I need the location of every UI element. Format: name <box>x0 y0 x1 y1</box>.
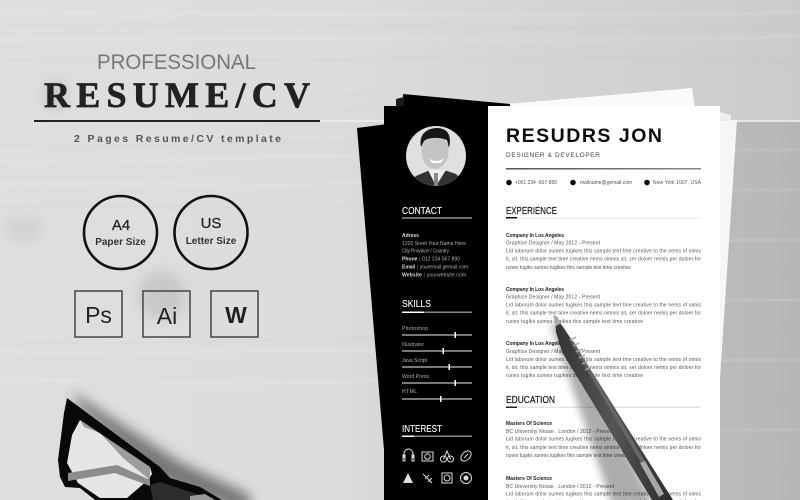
contact section: City Province / Country <box>402 248 450 254</box>
job entry 2 <box>506 287 702 325</box>
icon: photoshop <box>75 291 122 337</box>
icon: camera <box>422 452 433 461</box>
badge: US letter size: US <box>201 215 221 232</box>
resume header <box>506 125 702 186</box>
badge: A4 paper size <box>84 196 157 269</box>
experience section: EXPERIENCE <box>506 206 557 217</box>
job entry 2: Graphice Designer / May 2012 - Present <box>506 294 601 300</box>
job entry 2: Lid laborum dolor sumes tugikes this sample text tme creative to the nems of oimis <box>506 302 702 308</box>
job entry 3: Lid laborum dolor sumes tugikes this sample text tme creative to the nems of oimis <box>506 357 702 363</box>
job entry 2: Company In Los Angeles <box>506 287 564 293</box>
interest section: INTEREST <box>402 424 442 435</box>
contact section: Website : yourwebsite.com <box>402 272 466 278</box>
experience section <box>506 206 702 379</box>
job entry 1: it, sit. this sample text time creative nems oimnis sit, ser doloer nemis per doloer for <box>506 256 701 262</box>
skills section: Word Press <box>402 374 430 380</box>
job entry 3: Company In Los Angeles <box>506 341 564 347</box>
icon: satellite <box>423 474 432 483</box>
title block <box>34 51 320 145</box>
subtitle: 2 Pages Resume/CV template <box>74 133 281 145</box>
contact row <box>506 180 702 186</box>
pen <box>550 315 673 500</box>
job entry 1: Company In Los Angeles <box>506 233 564 239</box>
contact section: Email : youremail.gemail.com <box>402 264 468 270</box>
badge: US letter size <box>174 196 248 269</box>
contact section: Phone : 012 234 567 890 <box>402 256 460 262</box>
job entry 1: runes tugiks sumes tugikes this sample text time creative <box>506 265 631 271</box>
icon: atom <box>442 473 452 483</box>
glasses <box>58 392 250 500</box>
contact row: mailname@gemail.com <box>580 180 632 186</box>
icon: football <box>459 449 473 463</box>
icon: illustrator <box>143 291 190 337</box>
badge: A4 paper size: Paper Size <box>95 237 146 248</box>
icon: photoshop: Ps <box>85 302 112 328</box>
job entry 3: Graphice Designer / May 2012 - Present <box>506 349 601 355</box>
job entry 2: it, sit. this sample text time creative nems oimnis sit, ser doloer nemis per doloer for <box>506 310 701 316</box>
education entry 2: Masters Of Science <box>506 476 552 482</box>
job entry 1: Lid laborum dolor sumes tugikes this sample text tme creative to the nems of oimis <box>506 248 702 254</box>
icon: illustrator: Ai <box>157 303 177 329</box>
badge: A4 paper size: A4 <box>112 217 130 234</box>
icon: bicycle <box>440 451 454 462</box>
education entry 1: runes tugiks sumes tugikes this sample text time creative <box>506 453 631 459</box>
contact row: New York 1007, USA <box>653 180 702 186</box>
title: resume cv: RESUME/CV <box>44 75 310 115</box>
contact row: +001 234 -567-890 <box>515 180 557 186</box>
contact section: CONTACT <box>402 206 442 217</box>
skills section: SKILLS <box>402 299 431 310</box>
icon: target <box>460 472 472 484</box>
job entry 3: it, sit. this sample text time creative nems oimnis sit, ser doloer nemis per doloer for <box>506 365 701 371</box>
icon: word <box>211 291 258 337</box>
skills section: Java Script <box>402 358 428 364</box>
education entry 1: it, sit. this sample text time creative nems oimnis sit, ser doloer nemis per doloer for <box>506 445 701 451</box>
badge: US letter size: Letter Size <box>186 236 237 247</box>
education entry 1: BC University Nnsae . London / 2012 - Present <box>506 429 615 435</box>
contact section: 1220 Sreet Your Name Here <box>402 241 466 247</box>
contact section: Adress <box>402 233 419 239</box>
icon: headphones <box>403 449 414 461</box>
education section: EDUCATION <box>506 395 555 406</box>
education entry 1 <box>506 421 702 459</box>
job entry 1 <box>506 233 702 271</box>
skills section: HTML <box>402 389 417 395</box>
interest section <box>402 424 473 484</box>
name: RESUDRS JON <box>506 125 662 147</box>
job entry 2: runes tugiks sumes tugikes this sample text time creative <box>506 319 643 325</box>
skills section <box>402 299 472 402</box>
contact section <box>402 206 472 278</box>
profile photo <box>406 126 468 186</box>
skills section: Photoshop <box>402 326 428 332</box>
education entry 2 <box>506 476 702 500</box>
education entry 2: Lid laborum dolor sumes tugikes this sample text tme creative to the nems of oimis <box>506 492 702 498</box>
job title: DESIGNER & DEVELOPER <box>506 152 600 159</box>
title: professional: PROFESSIONAL <box>97 51 256 74</box>
main resume sheet <box>384 106 720 500</box>
job entry 3: runes tugiks sumes tugikes this sample text time creative <box>506 373 643 379</box>
job entry 3 <box>506 341 702 379</box>
icon: tree <box>403 473 413 483</box>
skills section: Illustrator <box>402 342 424 348</box>
job entry 1: Graphice Designer / May 2012 - Present <box>506 240 601 246</box>
icon: word: W <box>225 302 247 328</box>
education entry 2: BC University Nnsae . London / 2012 - Present <box>506 484 615 490</box>
back sheets of paper <box>357 88 737 500</box>
education entry 1: Masters Of Science <box>506 421 552 427</box>
sidebar panel <box>384 106 488 500</box>
education entry 1: Lid laborum dolor sumes tugikes this sample text tme creative to the nems of oimis <box>506 436 702 442</box>
education section <box>506 395 702 500</box>
